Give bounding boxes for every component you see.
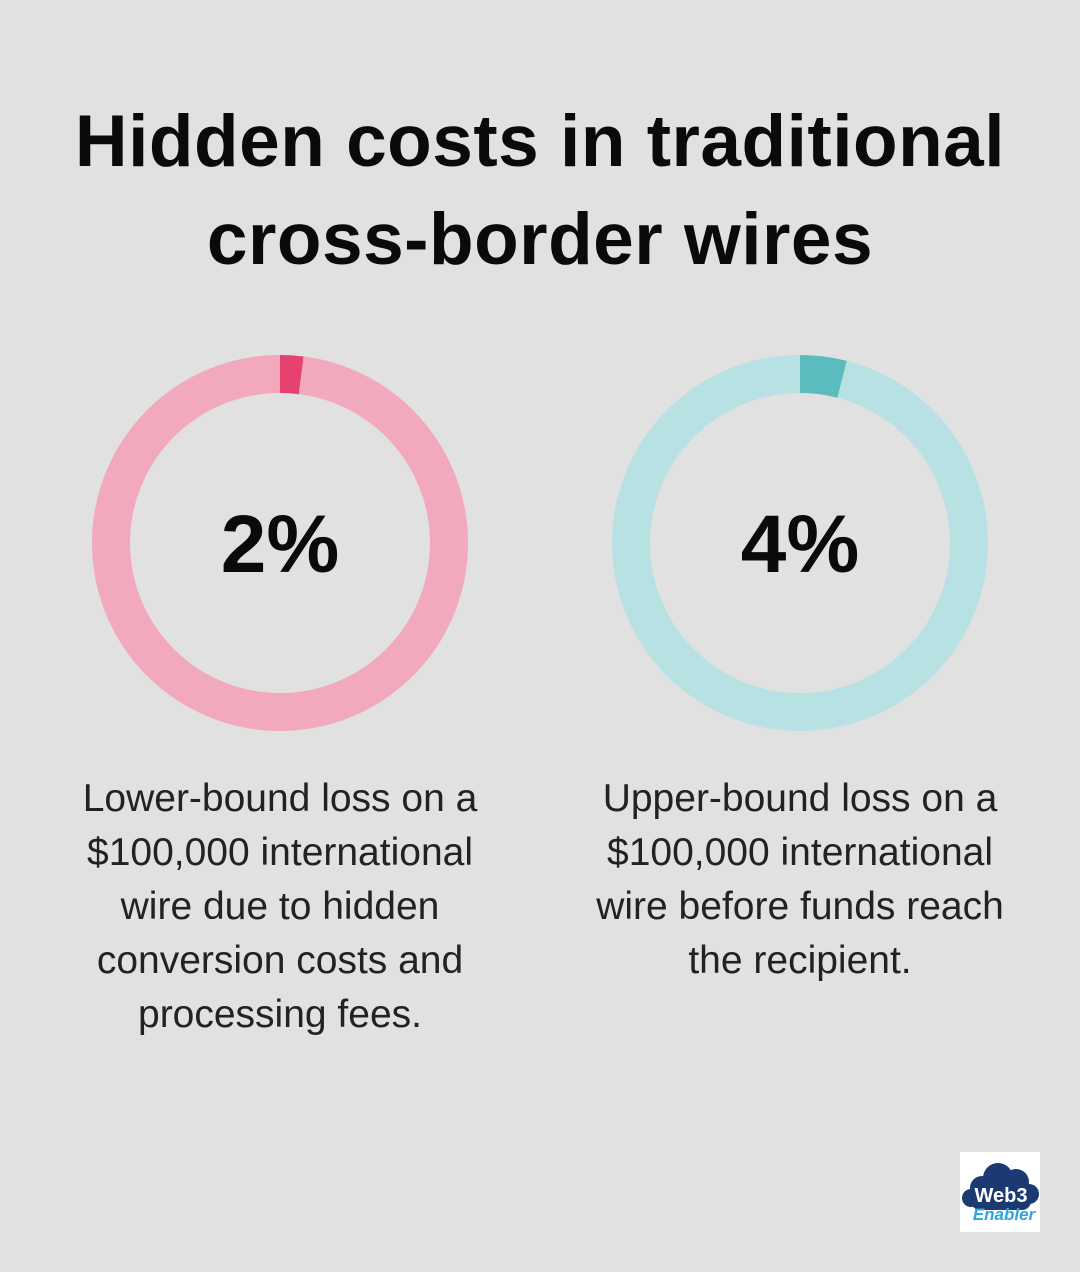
caption: upper bound: $100,000 international xyxy=(607,831,993,874)
caption: lower bound: wire due to hidden xyxy=(121,885,439,928)
value: 4%: 4% xyxy=(741,499,859,590)
caption: lower bound: conversion costs and xyxy=(97,939,463,982)
caption: lower bound: Lower-bound loss on a xyxy=(83,777,477,820)
title xyxy=(75,101,1005,280)
caption: upper bound: the recipient. xyxy=(688,939,912,982)
title: cross-border wires xyxy=(207,199,873,280)
logo: Web3 Enabler: Web3 xyxy=(975,1185,1027,1207)
caption: lower bound: processing fees. xyxy=(138,993,422,1036)
caption: lower bound: $100,000 international xyxy=(87,831,473,874)
logo: Web3 Enabler: Enabler xyxy=(973,1205,1037,1224)
logo: Web3 Enabler xyxy=(960,1152,1040,1232)
donut: 2% xyxy=(92,355,468,731)
caption: upper bound xyxy=(596,777,1004,982)
caption: upper bound: Upper-bound loss on a xyxy=(603,777,997,820)
value: 2%: 2% xyxy=(221,499,339,590)
title: Hidden costs in traditional xyxy=(75,101,1005,182)
caption: lower bound xyxy=(83,777,478,1036)
donut: 4% xyxy=(612,355,988,731)
caption: upper bound: wire before funds reach xyxy=(596,885,1004,928)
